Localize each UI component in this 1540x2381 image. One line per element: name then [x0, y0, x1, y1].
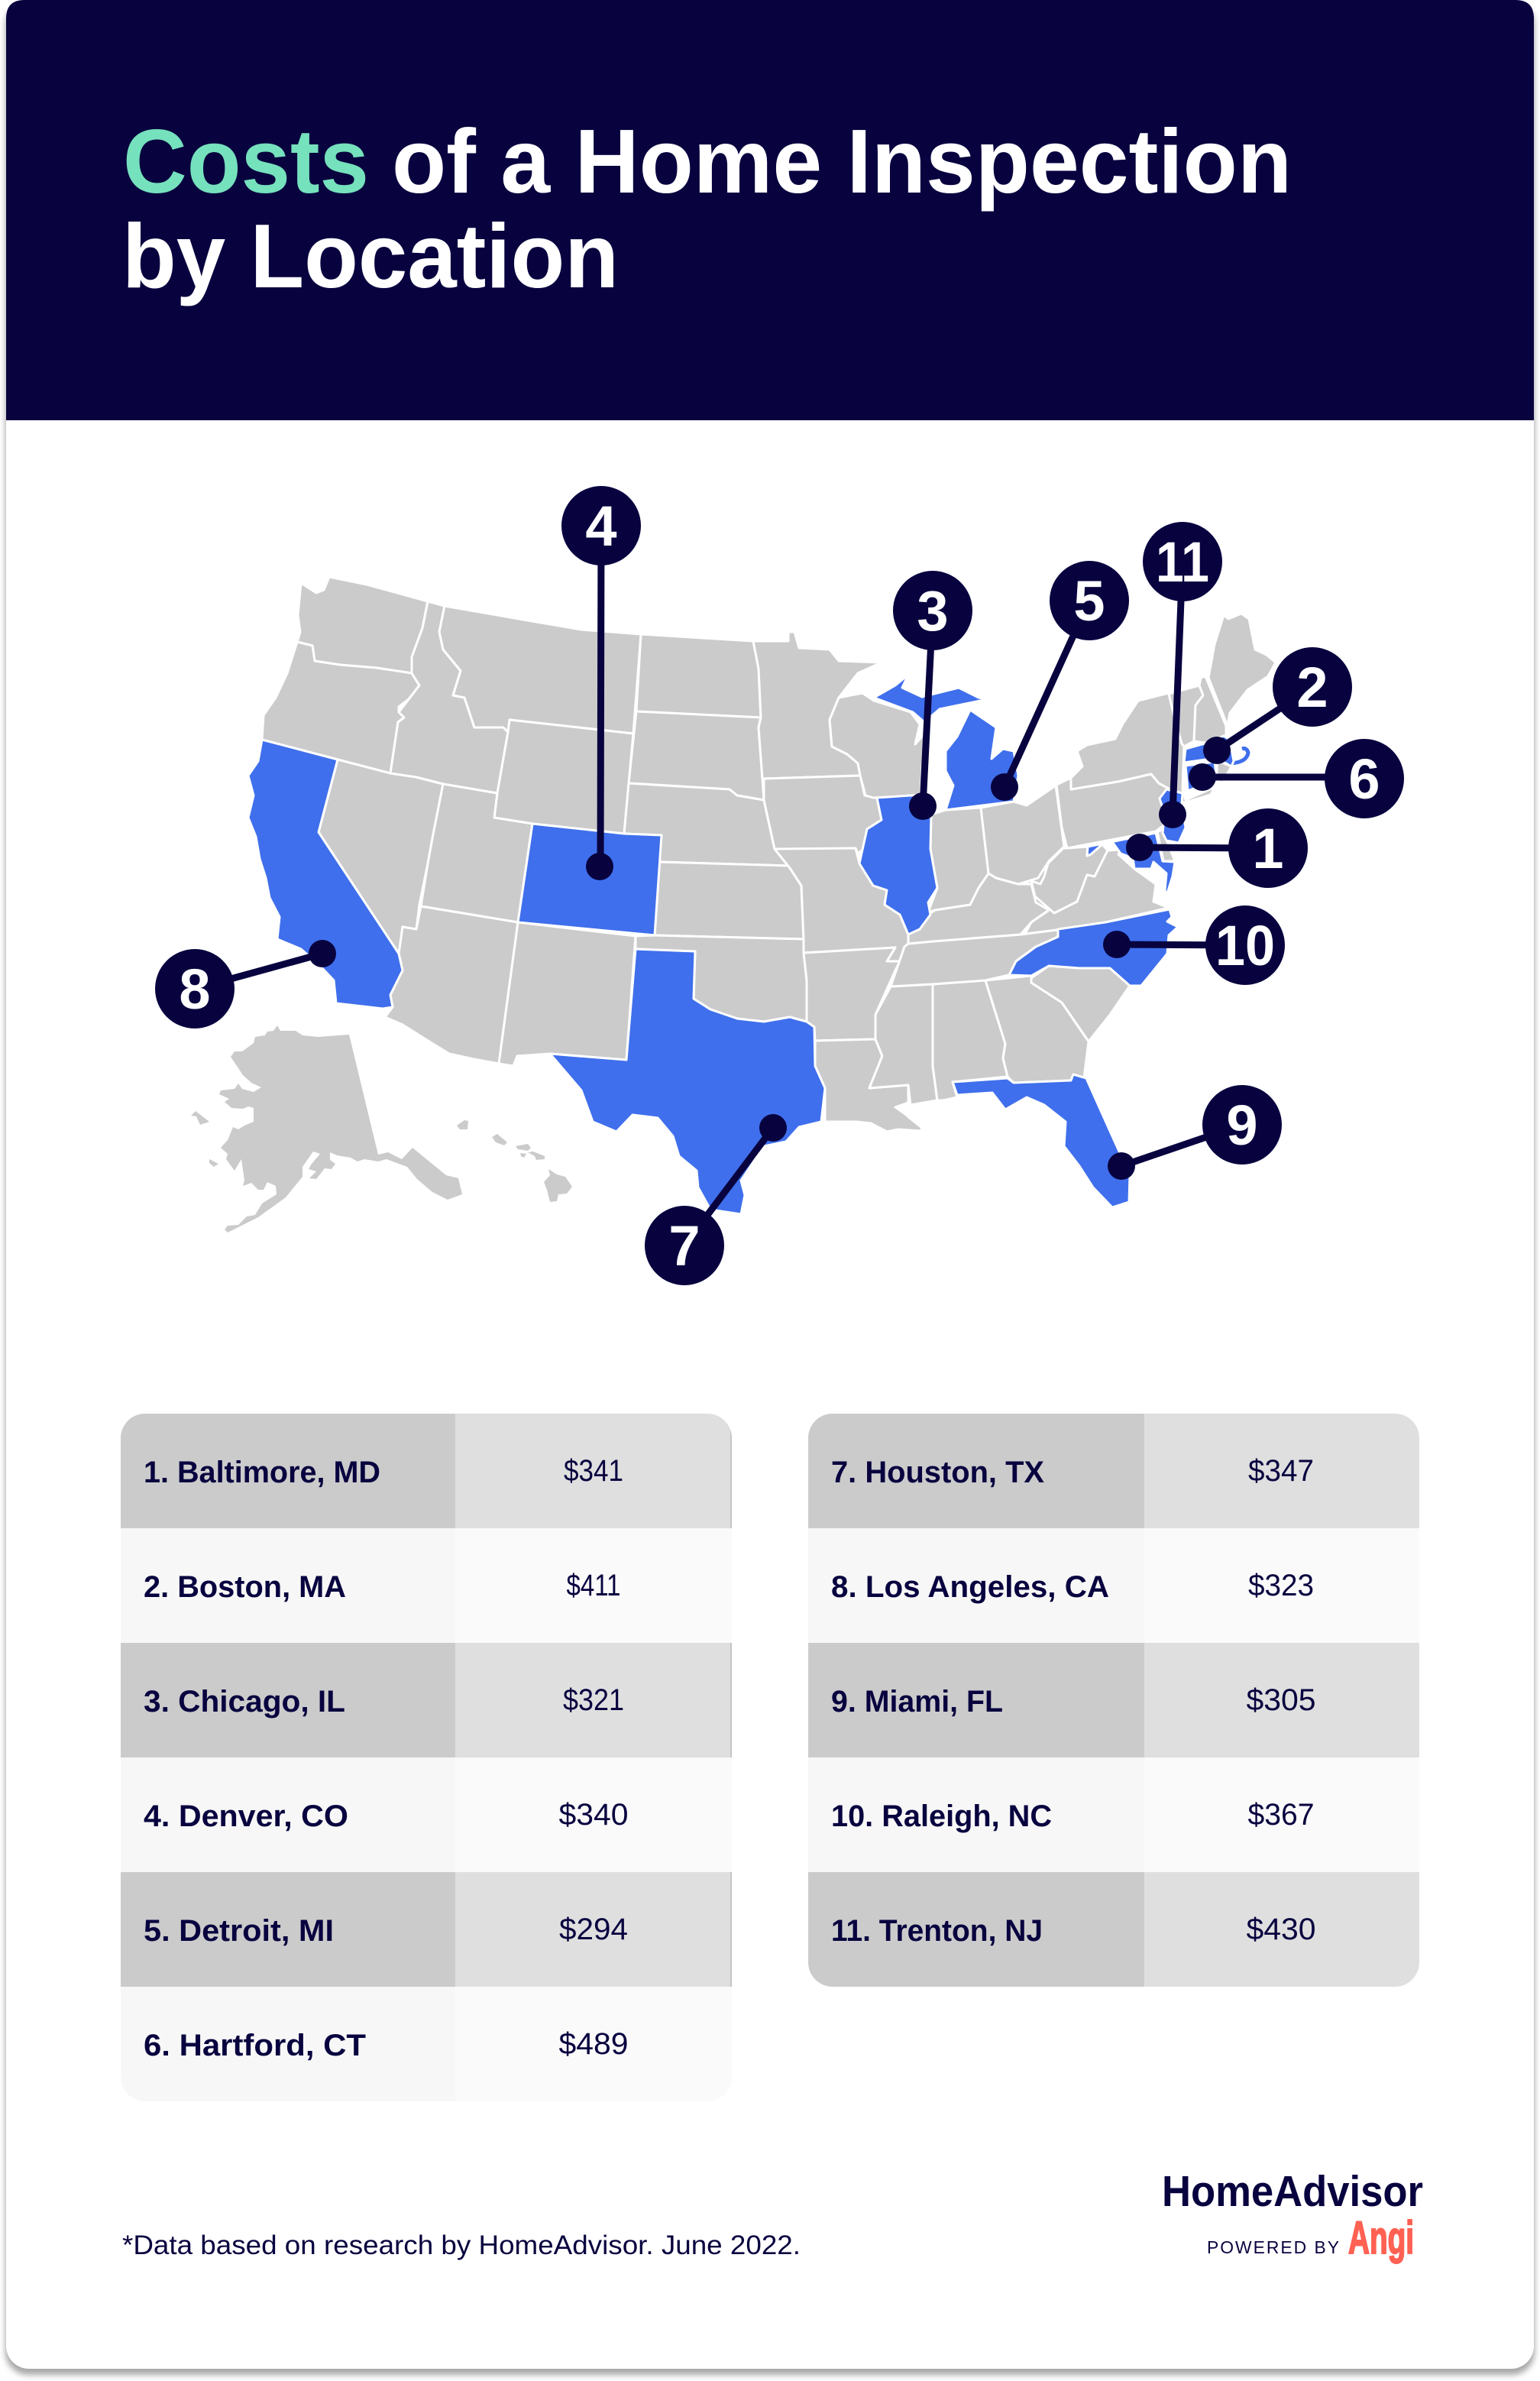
map of the United States [191, 577, 1276, 1233]
Alaska islands and Hawaii [191, 1111, 572, 1202]
title [122, 111, 1292, 307]
table rows: left: $340 [559, 1798, 628, 1832]
highlighted state: Michigan [874, 675, 1018, 810]
title: of a Home Inspection [392, 111, 1292, 212]
callout 7: Houston: 7 [668, 1214, 700, 1278]
non-highlighted states [262, 577, 1276, 1132]
title: by Location [122, 206, 619, 307]
table rows: left: $294 [559, 1913, 628, 1946]
header band [6, 0, 1534, 420]
HomeAdvisor logo [1162, 2167, 1423, 2263]
highlighted state: North Carolina [1009, 909, 1178, 986]
callout 2: Boston [1203, 647, 1352, 764]
callout 1: Baltimore [1126, 808, 1308, 888]
table rows: right: 11. Trenton, NJ [831, 1914, 1043, 1948]
callout 7: Houston [645, 1114, 787, 1285]
callout 9: Miami [1108, 1085, 1282, 1180]
callout 1: Baltimore: 1 [1252, 817, 1284, 880]
Alaska [219, 1025, 462, 1233]
highlighted state: Colorado [518, 824, 662, 935]
table rows: left: $489 [559, 2027, 628, 2061]
callout 6: Hartford [1189, 739, 1404, 818]
table rows: right: $323 [1248, 1569, 1314, 1602]
callout 3: Chicago [893, 571, 972, 820]
table rows: right: $430 [1247, 1913, 1315, 1946]
callout 5: Detroit [991, 561, 1129, 801]
highlighted state: California [248, 740, 403, 1009]
highlighted state: Florida [953, 1074, 1130, 1207]
table rows: right: $305 [1247, 1683, 1315, 1717]
table rows: right: $347 [1248, 1454, 1314, 1488]
callout 2: Boston: 2 [1296, 656, 1328, 719]
callout 9: Miami: 9 [1226, 1093, 1258, 1157]
callout 10: Raleigh: 10 [1215, 914, 1275, 977]
table rows: right: 7. Houston, TX [831, 1456, 1044, 1489]
HomeAdvisor logo: POWERED BY [1207, 2237, 1341, 2257]
table rows: left: 6. Hartford, CT [144, 2029, 366, 2062]
callout 4: Denver: 4 [585, 494, 617, 558]
highlighted state: Connecticut [1186, 762, 1217, 791]
table rows: right: 9. Miami, FL [831, 1685, 1003, 1719]
callout 11: Trenton [1143, 522, 1222, 828]
callout 11: Trenton: 11 [1156, 530, 1209, 594]
table rows: left: $411 [567, 1569, 620, 1602]
table rows: right: 8. Los Angeles, CA [831, 1570, 1109, 1604]
HomeAdvisor logo: Angi [1348, 2212, 1414, 2263]
table rows: left: $321 [563, 1683, 624, 1717]
HomeAdvisor logo: HomeAdvisor [1162, 2167, 1423, 2216]
table rows: left: $341 [564, 1454, 623, 1488]
highlighted state: Massachusetts [1184, 736, 1248, 766]
highlighted state: Maryland [1087, 833, 1175, 896]
highlighted state: Texas [550, 949, 825, 1214]
table rows: left: 3. Chicago, IL [144, 1685, 345, 1719]
callout 5: Detroit: 5 [1073, 569, 1105, 633]
table rows: right: 10. Raleigh, NC [831, 1800, 1052, 1833]
highlighted state: New Jersey [1160, 789, 1186, 843]
table rows: right [831, 1454, 1315, 1948]
callout 3: Chicago: 3 [917, 579, 949, 643]
callout 8: Los Angeles: 8 [179, 957, 211, 1021]
table rows: left [144, 1454, 628, 2062]
table backgrounds: right [808, 1414, 1419, 1987]
table rows: left: 2. Boston, MA [144, 1570, 346, 1604]
title: Costs [123, 111, 369, 212]
table rows: left: 4. Denver, CO [144, 1800, 348, 1833]
table backgrounds: left [121, 1414, 732, 1987]
footnote: *Data based on research by HomeAdvisor. June 2022. [122, 2230, 801, 2260]
table rows: left: 5. Detroit, MI [144, 1914, 334, 1948]
callout 6: Hartford: 6 [1348, 747, 1380, 811]
table rows: right: $367 [1248, 1798, 1314, 1832]
callout 8: Los Angeles [155, 940, 336, 1029]
highlighted state: Illinois [859, 795, 937, 935]
callout 10: Raleigh [1103, 905, 1285, 985]
table rows: left: 1. Baltimore, MD [144, 1456, 380, 1489]
callout 4: Denver [561, 486, 641, 880]
